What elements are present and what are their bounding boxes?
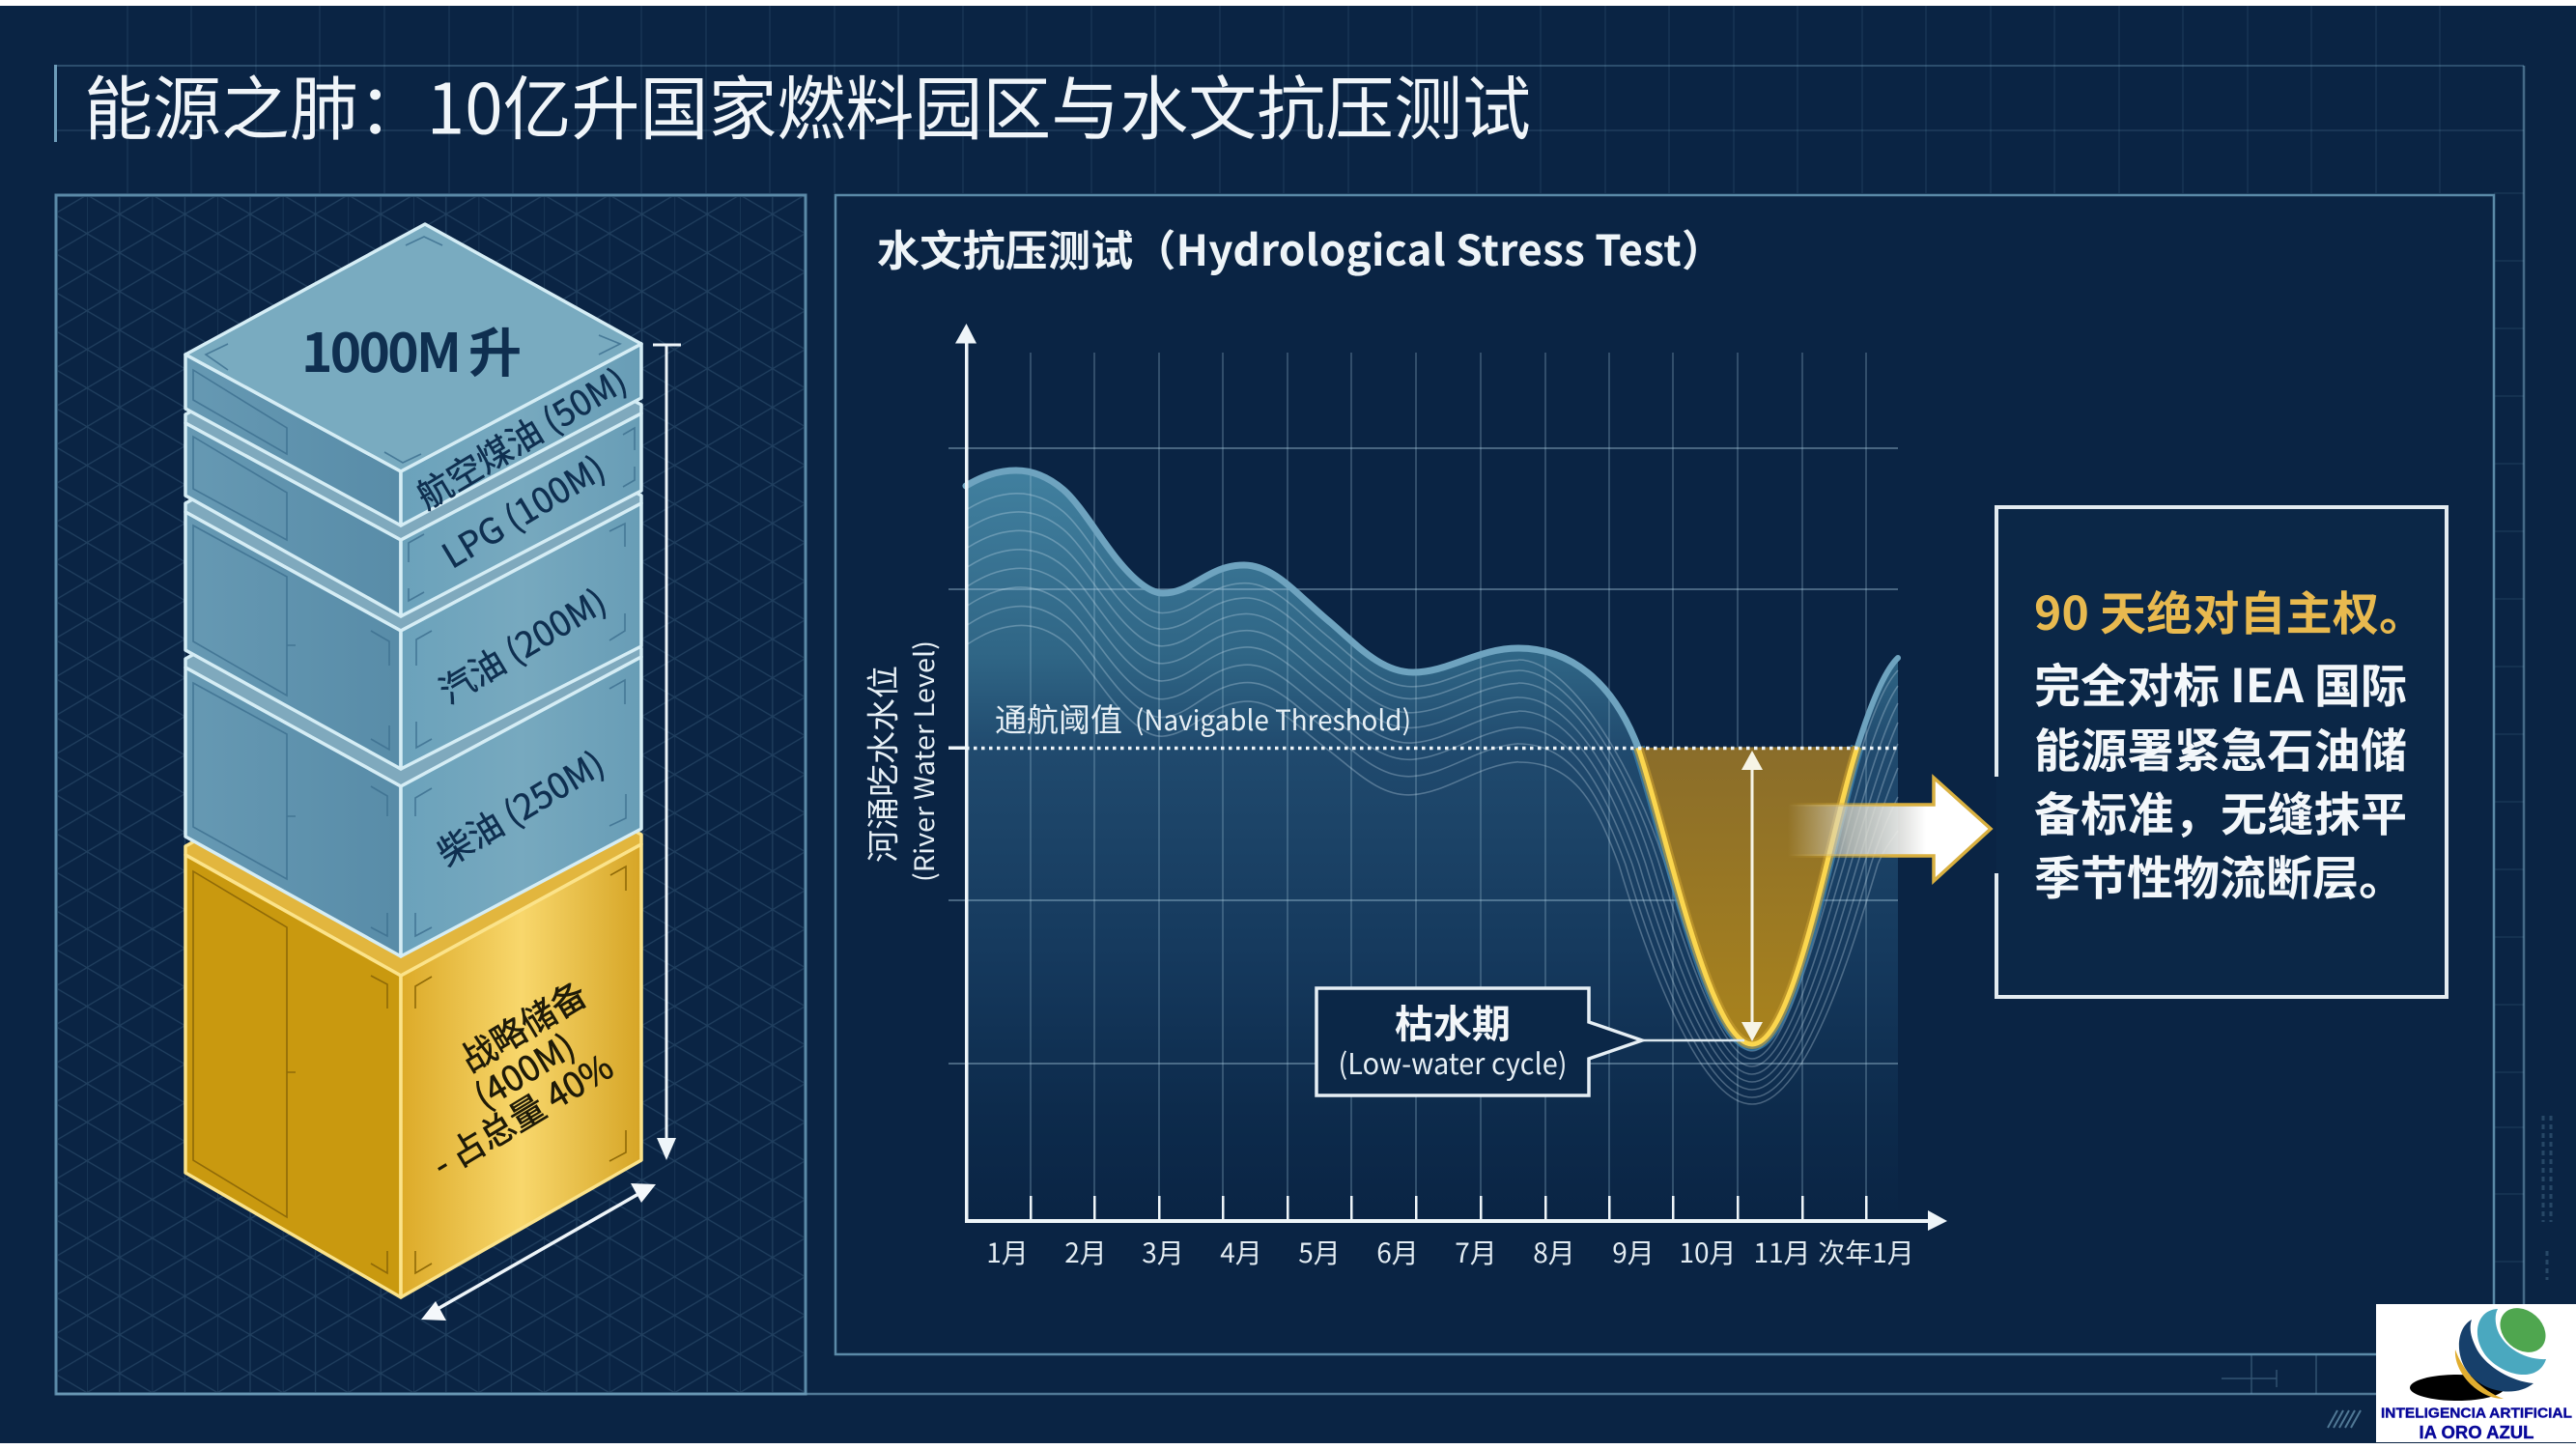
- callout box: 90 days: 90 天绝对自主权。: [2034, 576, 2425, 643]
- arrow: trough to callout: [1788, 778, 1991, 881]
- callout box: 90 days: 季节性物流断层。: [2034, 840, 2405, 908]
- title: 能源之肺：10亿升国家燃料园区与水文抗压测试: [84, 52, 1531, 155]
- panel: fuel storage tower: [56, 195, 806, 1394]
- tank: strategic reserve 400M: (400M): [464, 1019, 583, 1120]
- water contour lines: [966, 482, 1898, 1104]
- callout: low-water cycle: [1316, 988, 1744, 1095]
- panel heading: 水文抗压测试（Hydrological Stress Test）: [877, 216, 1724, 278]
- month labels: 9月: [1612, 1233, 1655, 1271]
- y axis label: [858, 640, 943, 882]
- month labels: 2月: [1064, 1233, 1107, 1271]
- y axis label: (River Water Level): [904, 640, 943, 882]
- tank: LPG 100M: [185, 290, 641, 616]
- axes: [948, 324, 1947, 1231]
- month labels: 4月: [1220, 1233, 1262, 1271]
- logo: IA Oro Azul: [2376, 1299, 2576, 1442]
- chart: river water level: [858, 324, 1947, 1271]
- callout box: 90 days: [1996, 507, 2447, 997]
- month labels: 10月: [1679, 1233, 1737, 1271]
- threshold label: [995, 695, 1411, 741]
- month labels: 1月: [986, 1233, 1029, 1271]
- bottom frame line: [56, 1393, 2376, 1395]
- callout: low-water cycle: (Low-water cycle): [1339, 1040, 1567, 1083]
- logo: IA Oro Azul: IA ORO AZUL: [2419, 1423, 2534, 1442]
- arrow: water deficit: [1741, 751, 1763, 1041]
- month labels: 7月: [1455, 1233, 1497, 1271]
- tank: LPG 100M: LPG (100M): [432, 441, 613, 579]
- tank: gasoline 200M: [185, 373, 641, 769]
- tank: jet fuel 50M with top face: [185, 224, 641, 526]
- tank: jet fuel 50M with top face: 航空煤油 (50M): [406, 354, 636, 520]
- tank: gasoline 200M: 汽油 (200M): [429, 575, 614, 714]
- threshold label: 通航阈值: [995, 695, 1122, 741]
- callout box: 90 days: 能源署紧急石油储: [2034, 713, 2407, 781]
- month labels: 3月: [1142, 1233, 1184, 1271]
- month labels: 次年1月: [1818, 1233, 1914, 1271]
- water level curve: [966, 470, 1898, 748]
- label: total 1000M: 1000M 升: [301, 310, 522, 387]
- tank: diesel 250M: [185, 526, 641, 956]
- logo: IA Oro Azul: INTELIGENCIA ARTIFICIAL: [2381, 1405, 2572, 1422]
- callout box: 90 days: 备标准，无缝抹平: [2034, 777, 2407, 844]
- month labels: 11月: [1753, 1233, 1811, 1271]
- callout box: 90 days: 完全对标 IEA 国际: [2034, 648, 2407, 716]
- grid lines: [948, 353, 1898, 1221]
- threshold line: [966, 747, 1898, 750]
- month labels: [986, 1233, 1914, 1271]
- month labels: 5月: [1298, 1233, 1341, 1271]
- threshold label: (Navigable Threshold): [1135, 698, 1411, 739]
- arrow: height dimension: [653, 344, 681, 1160]
- water area: [966, 470, 1898, 1221]
- month labels: 6月: [1376, 1233, 1419, 1271]
- y axis label: 河涌吃水水位: [858, 666, 904, 863]
- tank: strategic reserve 400M: [185, 715, 641, 1297]
- tank: strategic reserve 400M: - 占总量 40%: [422, 1040, 621, 1187]
- arrow: width dimension: [421, 1183, 656, 1321]
- tank: strategic reserve 400M: 战略储备: [450, 968, 595, 1082]
- month labels: 8月: [1533, 1233, 1575, 1271]
- callout: low-water cycle: 枯水期: [1395, 993, 1511, 1049]
- tank: diesel 250M: 柴油 (250M): [427, 737, 612, 876]
- panel: hydrological stress test: [835, 195, 2494, 1354]
- low-water trough: [1638, 747, 1857, 1044]
